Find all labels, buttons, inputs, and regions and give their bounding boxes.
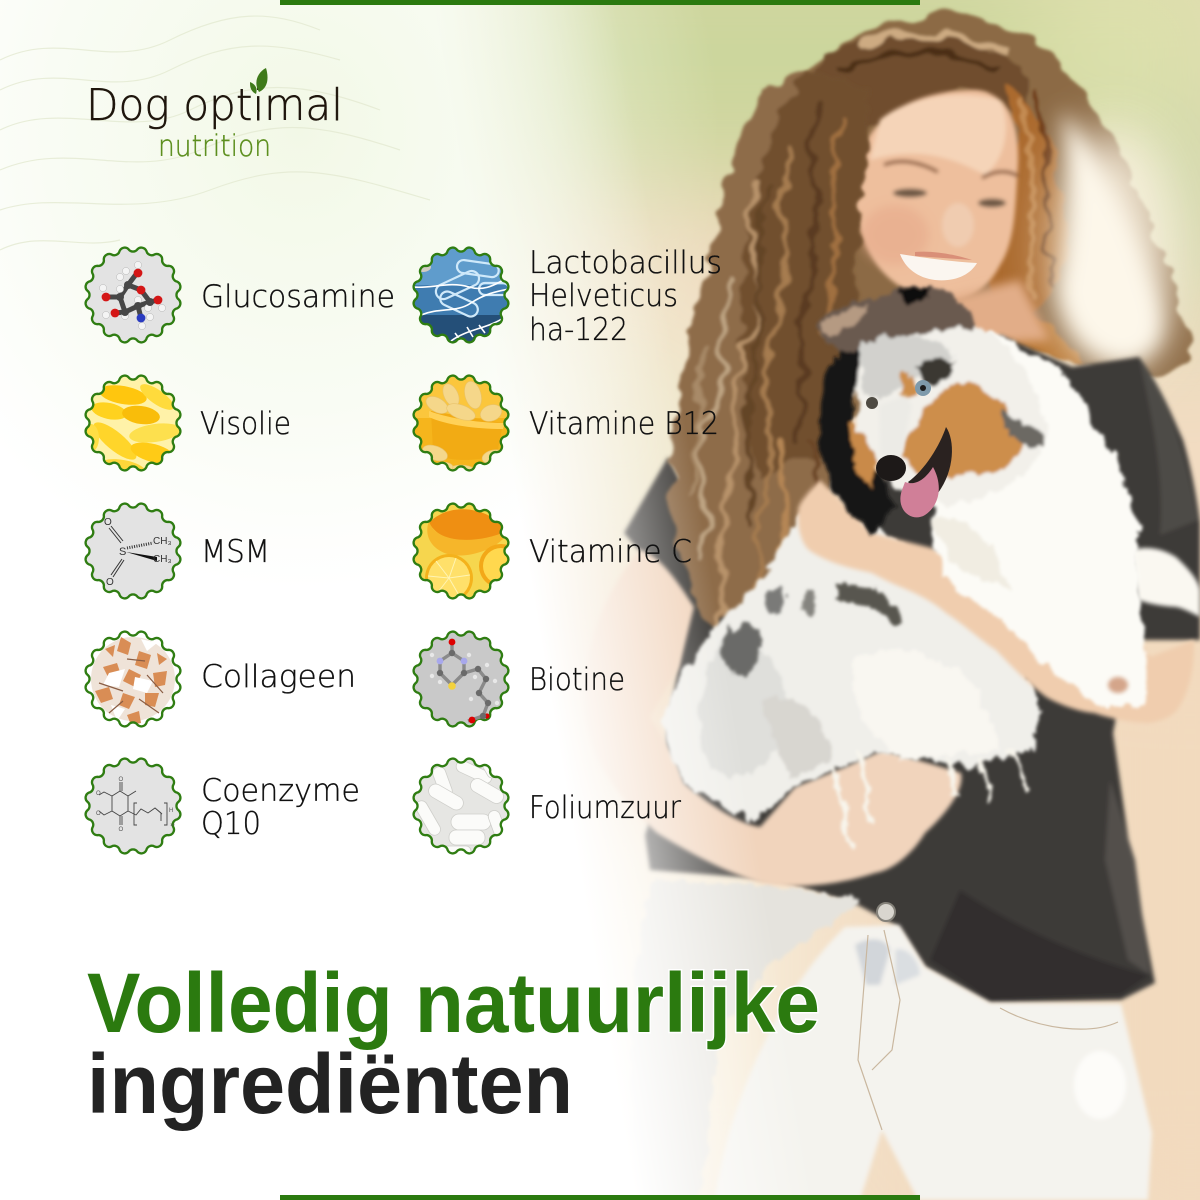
ingredient: MSM	[81, 499, 270, 603]
logo: Dog optimal nutrition	[86, 68, 343, 163]
dog: nose and mouth	[876, 427, 952, 493]
dog: forehead	[860, 335, 955, 400]
label: Coenzyme Q10: Coenzyme	[201, 773, 360, 809]
woman: jeans	[715, 925, 1152, 1200]
jeans: button and seams	[858, 903, 1118, 1130]
dog: tail fur	[631, 880, 860, 1200]
woman: dark t-shirt	[624, 335, 1200, 1003]
icon: coenzyme Q10 structure: O	[96, 791, 101, 797]
dog: tongue	[900, 467, 939, 517]
icon: MSM molecule: O	[104, 517, 112, 528]
icon: MSM molecule: CH₃	[153, 554, 172, 565]
bottom green bar	[280, 1195, 920, 1200]
left panel background tint	[0, 0, 720, 590]
woman: hair back and right side	[760, 15, 1192, 420]
label: Foliumzuur: Foliumzuur	[529, 790, 681, 826]
icon: fish oil capsules	[84, 374, 182, 472]
dog: body	[661, 513, 1040, 845]
ingredient: Foliumzuur	[409, 752, 681, 858]
label: MSM: MSM	[201, 534, 270, 570]
icon: coenzyme Q10 structure: O	[118, 827, 124, 833]
icon: biotin molecule	[409, 627, 513, 731]
woman: hair front left locks	[670, 70, 870, 630]
label: Glucosamine: Glucosamine	[201, 279, 395, 315]
icon: coenzyme Q10 structure: O	[118, 777, 124, 783]
woman: sunlit hair highlight	[1053, 110, 1177, 375]
icon: collagen flakes	[84, 630, 182, 728]
dog: ears	[814, 287, 973, 360]
icon: coenzyme Q10 structure: 10	[170, 822, 175, 827]
label: Coenzyme Q10	[201, 773, 360, 842]
dog: muzzle stripe	[879, 395, 912, 457]
woman: smile	[900, 252, 977, 280]
woman: near arm	[584, 550, 962, 886]
label: Lactobacillus Helveticus ha-122: ha-122	[529, 312, 628, 348]
ingredient: Lactobacillus	[409, 243, 722, 348]
woman: neck	[935, 280, 1050, 345]
icon: coenzyme Q10 structure	[81, 754, 185, 858]
icon: tablets in a yellow bowl	[412, 374, 510, 472]
icon: blue bacteria	[412, 246, 510, 344]
dog: coat spots	[716, 581, 905, 682]
icon: MSM molecule: CH₃	[153, 536, 172, 547]
dog: tan markings	[849, 425, 877, 490]
label: Visolie: Visolie	[200, 406, 291, 442]
icon: MSM molecule	[81, 499, 185, 603]
label: Lactobacillus Helveticus ha-122	[529, 245, 722, 348]
ingredient: Biotine	[409, 627, 625, 731]
ingredient: Vitamine B12	[409, 371, 719, 477]
logo subline: nutrition	[158, 129, 271, 163]
label: Biotine: Biotine	[529, 662, 625, 698]
top green bar	[280, 0, 920, 5]
dog: black ruff	[819, 347, 898, 533]
logo leaf	[250, 68, 268, 94]
icon: glucosamine molecule	[81, 243, 185, 347]
title line 1: Volledig natuurlijke	[87, 956, 820, 1050]
icon: orange slices	[412, 502, 510, 600]
icon: coenzyme Q10 structure: O	[96, 811, 101, 817]
ingredient: Glucosamine	[81, 243, 395, 347]
ingredient: Collageen	[81, 627, 356, 731]
dog: head	[814, 287, 1047, 533]
woman: face	[856, 90, 1018, 301]
label: Collageen: Collageen	[201, 659, 356, 695]
icon: coenzyme Q10 structure: H	[169, 808, 173, 814]
ingredient: Coenzyme Q10	[81, 754, 360, 858]
ingredient: Visolie	[84, 374, 290, 472]
icon: MSM molecule: S	[119, 546, 126, 558]
label: Vitamine C: Vitamine C	[529, 534, 692, 570]
title: Volledig natuurlijke ingrediënten	[87, 956, 820, 1131]
icon: MSM molecule: O	[106, 577, 114, 588]
woman: far arm and hand over dog	[798, 480, 1194, 723]
ingredient: Vitamine C	[409, 499, 692, 603]
logo wordmark: Dog optimal	[86, 80, 343, 131]
label: Vitamine B12: Vitamine B12	[529, 406, 719, 442]
title line 2: ingrediënten	[87, 1037, 573, 1131]
label: Lactobacillus Helveticus ha-122: Helveticus	[529, 278, 678, 314]
label: Lactobacillus Helveticus ha-122: Lactobacillus	[529, 245, 722, 281]
dog: eyes	[866, 380, 931, 409]
icon: white capsules	[412, 757, 510, 855]
dog: white chest and leg fur	[930, 330, 1200, 707]
label: Coenzyme Q10: Q10	[201, 806, 261, 842]
